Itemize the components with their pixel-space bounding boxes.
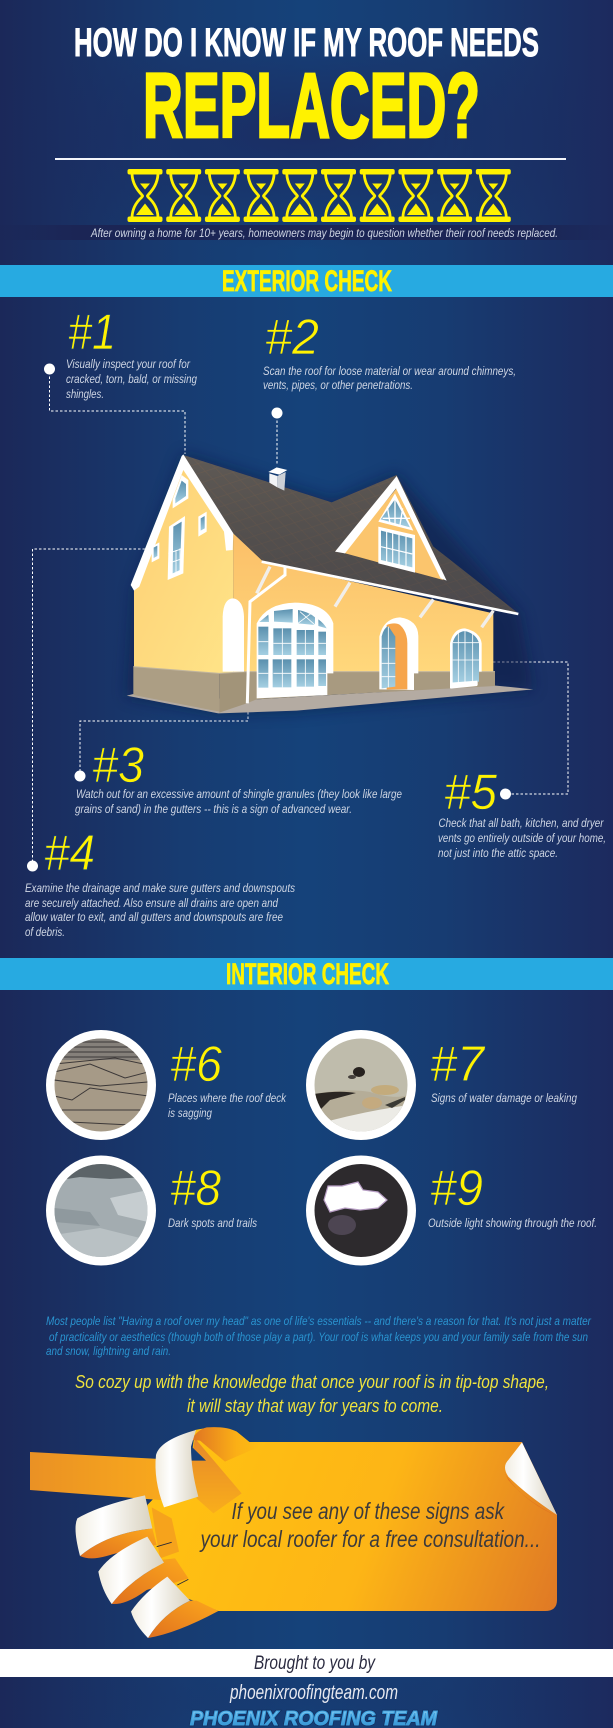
step 5: not just into the attic space. — [438, 846, 558, 860]
section bar: interior check: INTERIOR CHECK — [226, 958, 389, 991]
chimney — [268, 467, 287, 475]
step 3: Watch out for an excessive amount of shingle granules (they look like large — [76, 787, 402, 801]
section bar: interior check — [0, 958, 613, 991]
footer band: Brought to you by — [254, 1653, 376, 1674]
step 4: #4 — [44, 825, 95, 881]
finger 3 — [148, 1601, 218, 1638]
step 6: is sagging — [168, 1106, 212, 1120]
step 5 — [438, 764, 606, 860]
yellow closing statement — [75, 1372, 549, 1416]
step 3: grains of sand) in the gutters -- this is a sign of advanced wear. — [75, 802, 352, 816]
callout text on ribbon: your local roofer for a free consultation... — [199, 1526, 540, 1552]
notch — [191, 1446, 206, 1461]
step 2 — [263, 309, 516, 392]
website: phoenixroofingteam.com — [229, 1682, 398, 1704]
step 6: #6 — [170, 1036, 222, 1092]
step 8: Dark spots and trails — [168, 1216, 257, 1230]
step 1: cracked, torn, bald, or missing — [66, 372, 197, 386]
step 1: Visually inspect your roof for — [66, 357, 191, 371]
yellow closing statement: So cozy up with the knowledge that once your roof is in tip-top shape, — [75, 1372, 549, 1392]
ribbon body — [147, 1428, 557, 1611]
photo: sagging shingles — [46, 1030, 156, 1140]
paragraph: why a roof matters: and snow, lightning and rain. — [46, 1344, 171, 1358]
white rule — [55, 158, 566, 160]
illustration: yellow house — [127, 453, 533, 713]
step 2: Scan the roof for loose material or wear around chimneys, — [263, 364, 516, 378]
step 9: #9 — [430, 1160, 483, 1216]
step 3: #3 — [92, 737, 144, 793]
step 5: #5 — [444, 764, 497, 820]
title: header block — [55, 21, 566, 160]
footer band — [0, 1649, 613, 1677]
fold shading — [191, 1438, 242, 1513]
callout text on ribbon: If you see any of these signs ask — [232, 1498, 505, 1524]
callout text on ribbon — [199, 1498, 540, 1552]
step 4: of debris. — [25, 925, 65, 939]
illustration: paper ribbon pointing hand — [30, 1427, 557, 1638]
section bar: exterior check — [0, 265, 613, 298]
step 4: are securely attached. Also ensure all drains are open and — [25, 896, 278, 910]
large arched window — [257, 603, 333, 698]
dormer — [343, 488, 443, 580]
side wall — [134, 467, 233, 673]
pavement — [127, 685, 533, 713]
section bar: exterior check: EXTERIOR CHECK — [222, 265, 392, 298]
right arched window — [450, 628, 482, 688]
plinths — [133, 667, 219, 712]
finger 1 — [80, 1528, 157, 1558]
curled corner — [504, 1472, 557, 1516]
step 1 — [66, 304, 197, 401]
creases — [157, 1542, 188, 1585]
pointing arm — [30, 1452, 206, 1500]
white fold — [155, 1430, 198, 1507]
connector lines — [32, 372, 568, 866]
finger 2 — [112, 1558, 188, 1604]
connector dots — [27, 364, 511, 872]
top curl — [192, 1427, 267, 1462]
icons: row of ten hourglasses — [128, 169, 511, 222]
step 6: Places where the roof deck — [168, 1091, 287, 1105]
step 9 — [428, 1160, 597, 1230]
gutter and brackets — [262, 562, 518, 614]
step 4 — [25, 825, 295, 939]
step 1: shingles. — [66, 387, 104, 401]
step 7: #7 — [430, 1036, 486, 1092]
photo: water damage — [306, 1030, 416, 1140]
step 4: Examine the drainage and make sure gutters and downspouts — [25, 881, 295, 895]
roof — [183, 455, 518, 613]
step 2: #2 — [265, 309, 319, 365]
rear arch — [223, 598, 244, 672]
paragraph: why a roof matters — [46, 1314, 592, 1358]
door arch — [379, 617, 418, 690]
step 2: vents, pipes, or other penetrations. — [263, 378, 413, 392]
yellow closing statement: it will stay that way for years to come. — [187, 1396, 443, 1416]
step 1: #1 — [68, 304, 116, 360]
gable trim — [131, 454, 233, 591]
step 7: Signs of water damage or leaking — [431, 1091, 577, 1105]
front wall — [233, 533, 493, 673]
step 4: allow water to exit, and all gutters and downspouts are free — [25, 910, 283, 924]
left side windows — [173, 475, 188, 508]
step 8: #8 — [170, 1160, 221, 1216]
step 6 — [168, 1036, 287, 1120]
knuckle squares — [152, 1507, 179, 1558]
photo: light through roof — [306, 1156, 416, 1266]
step 7 — [430, 1036, 577, 1105]
step 8 — [168, 1160, 257, 1230]
step 3 — [75, 737, 402, 816]
photo: dark spots — [46, 1156, 156, 1266]
